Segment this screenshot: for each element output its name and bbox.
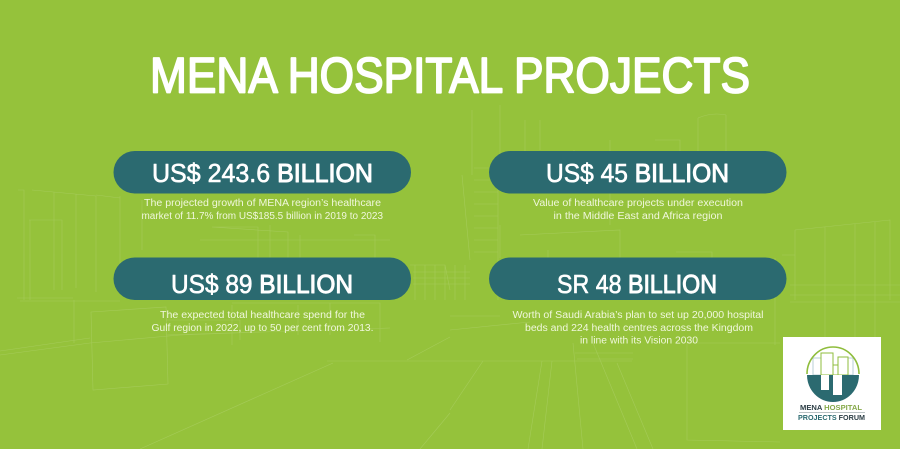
icon: green arc xyxy=(807,347,859,374)
description: Gulf healthcare spend xyxy=(152,310,374,334)
description: Saudi Arabia plan: Worth of Saudi Arabia’s plan to set up 20,000 hospital xyxy=(512,310,764,321)
figure: US$ 89 billion: US$ 89 BILLION xyxy=(171,269,353,299)
description: Saudi Arabia plan: in line with its Vision 2030 xyxy=(580,336,699,346)
description: Saudi Arabia plan: beds and 224 health centres across the Kingdom xyxy=(525,323,753,334)
logo text: MENA HOSPITAL xyxy=(800,403,863,412)
background: wireframe city skyline xyxy=(0,105,900,449)
description: projects under execution: Value of healthcare projects under execution xyxy=(533,198,743,209)
logo divider xyxy=(799,412,865,414)
panel: SR 48 billion xyxy=(489,258,786,346)
description: projects under execution: in the Middle East and Africa region xyxy=(554,211,722,222)
figure: US$ 243.6 billion: US$ 243.6 BILLION xyxy=(152,158,373,188)
title: MENA HOSPITAL PROJECTS xyxy=(150,48,750,104)
logo text: PROJECTS FORUM xyxy=(798,413,865,422)
logo background xyxy=(783,337,881,430)
panel: US$ 45 billion xyxy=(489,151,786,222)
pill: US$ 243.6 billion xyxy=(114,151,411,194)
description: market growth xyxy=(142,198,384,222)
pill: US$ 89 billion xyxy=(114,258,411,300)
panel: US$ 89 billion xyxy=(114,258,411,334)
pill: SR 48 billion xyxy=(489,258,786,300)
icon: teal half circle xyxy=(807,375,859,402)
icon: building outlines xyxy=(813,353,853,375)
description: Gulf healthcare spend: The expected total healthcare spend for the xyxy=(160,310,366,321)
logo: MENA Hospital Projects Forum xyxy=(783,337,881,430)
panel: US$ 243.6 billion xyxy=(114,151,411,222)
figure: SR 48 billion: SR 48 BILLION xyxy=(557,269,717,299)
description: projects under execution xyxy=(533,198,743,222)
description: market growth: The projected growth of MENA region’s healthcare xyxy=(144,198,382,209)
pill: US$ 45 billion xyxy=(489,151,786,194)
description: Saudi Arabia plan xyxy=(512,310,764,346)
description: Gulf healthcare spend: Gulf region in 2022, up to 50 per cent from 2013. xyxy=(152,323,374,334)
icon: white towers in circle xyxy=(821,375,842,395)
logo text xyxy=(798,403,865,422)
description: market growth: market of 11.7% from US$185.5 billion in 2019 to 2023 xyxy=(142,211,384,222)
figure: US$ 45 billion: US$ 45 BILLION xyxy=(546,158,729,188)
